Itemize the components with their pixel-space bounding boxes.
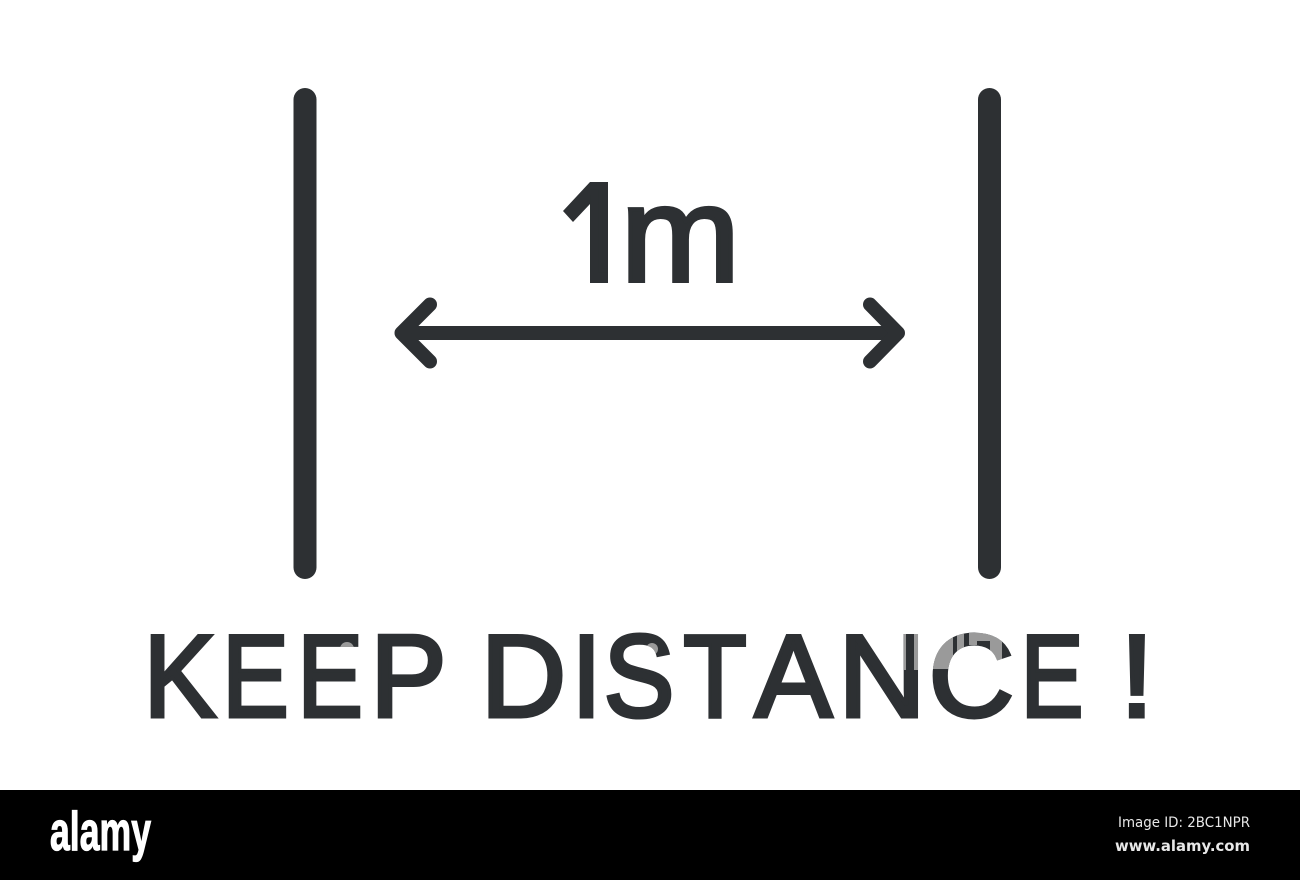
- left vertical bar: [294, 88, 316, 579]
- heading: keep distance: D: [481, 610, 566, 742]
- double-headed arrow: [402, 304, 898, 362]
- heading: keep distance: K: [144, 610, 216, 742]
- heading: keep distance: A: [755, 610, 832, 742]
- heading: keep distance: !: [1120, 610, 1154, 742]
- distance label: 1m: 1: [554, 158, 630, 310]
- distance label: 1m: m: [620, 158, 740, 310]
- heading: keep distance: E: [298, 610, 363, 742]
- footer logo: alamy: alamy: [50, 800, 151, 862]
- heading: keep distance: I: [572, 610, 601, 742]
- footer bar: [0, 790, 1300, 880]
- heading: keep distance: C: [929, 610, 1014, 742]
- heading: keep distance: P: [370, 610, 444, 742]
- heading: keep distance: E: [222, 610, 289, 742]
- heading: keep distance: N: [838, 610, 926, 742]
- website url: www.alamy.com: [1115, 837, 1250, 855]
- right vertical bar: [978, 88, 1001, 579]
- heading: keep distance: E: [1021, 610, 1083, 742]
- watermark traces over heading: [340, 633, 1002, 670]
- image id: Image ID: 2BC1NPR: [1118, 815, 1250, 831]
- heading: keep distance: T: [683, 610, 747, 742]
- heading: keep distance: S: [604, 610, 674, 742]
- distance label: 1m: [563, 182, 733, 283]
